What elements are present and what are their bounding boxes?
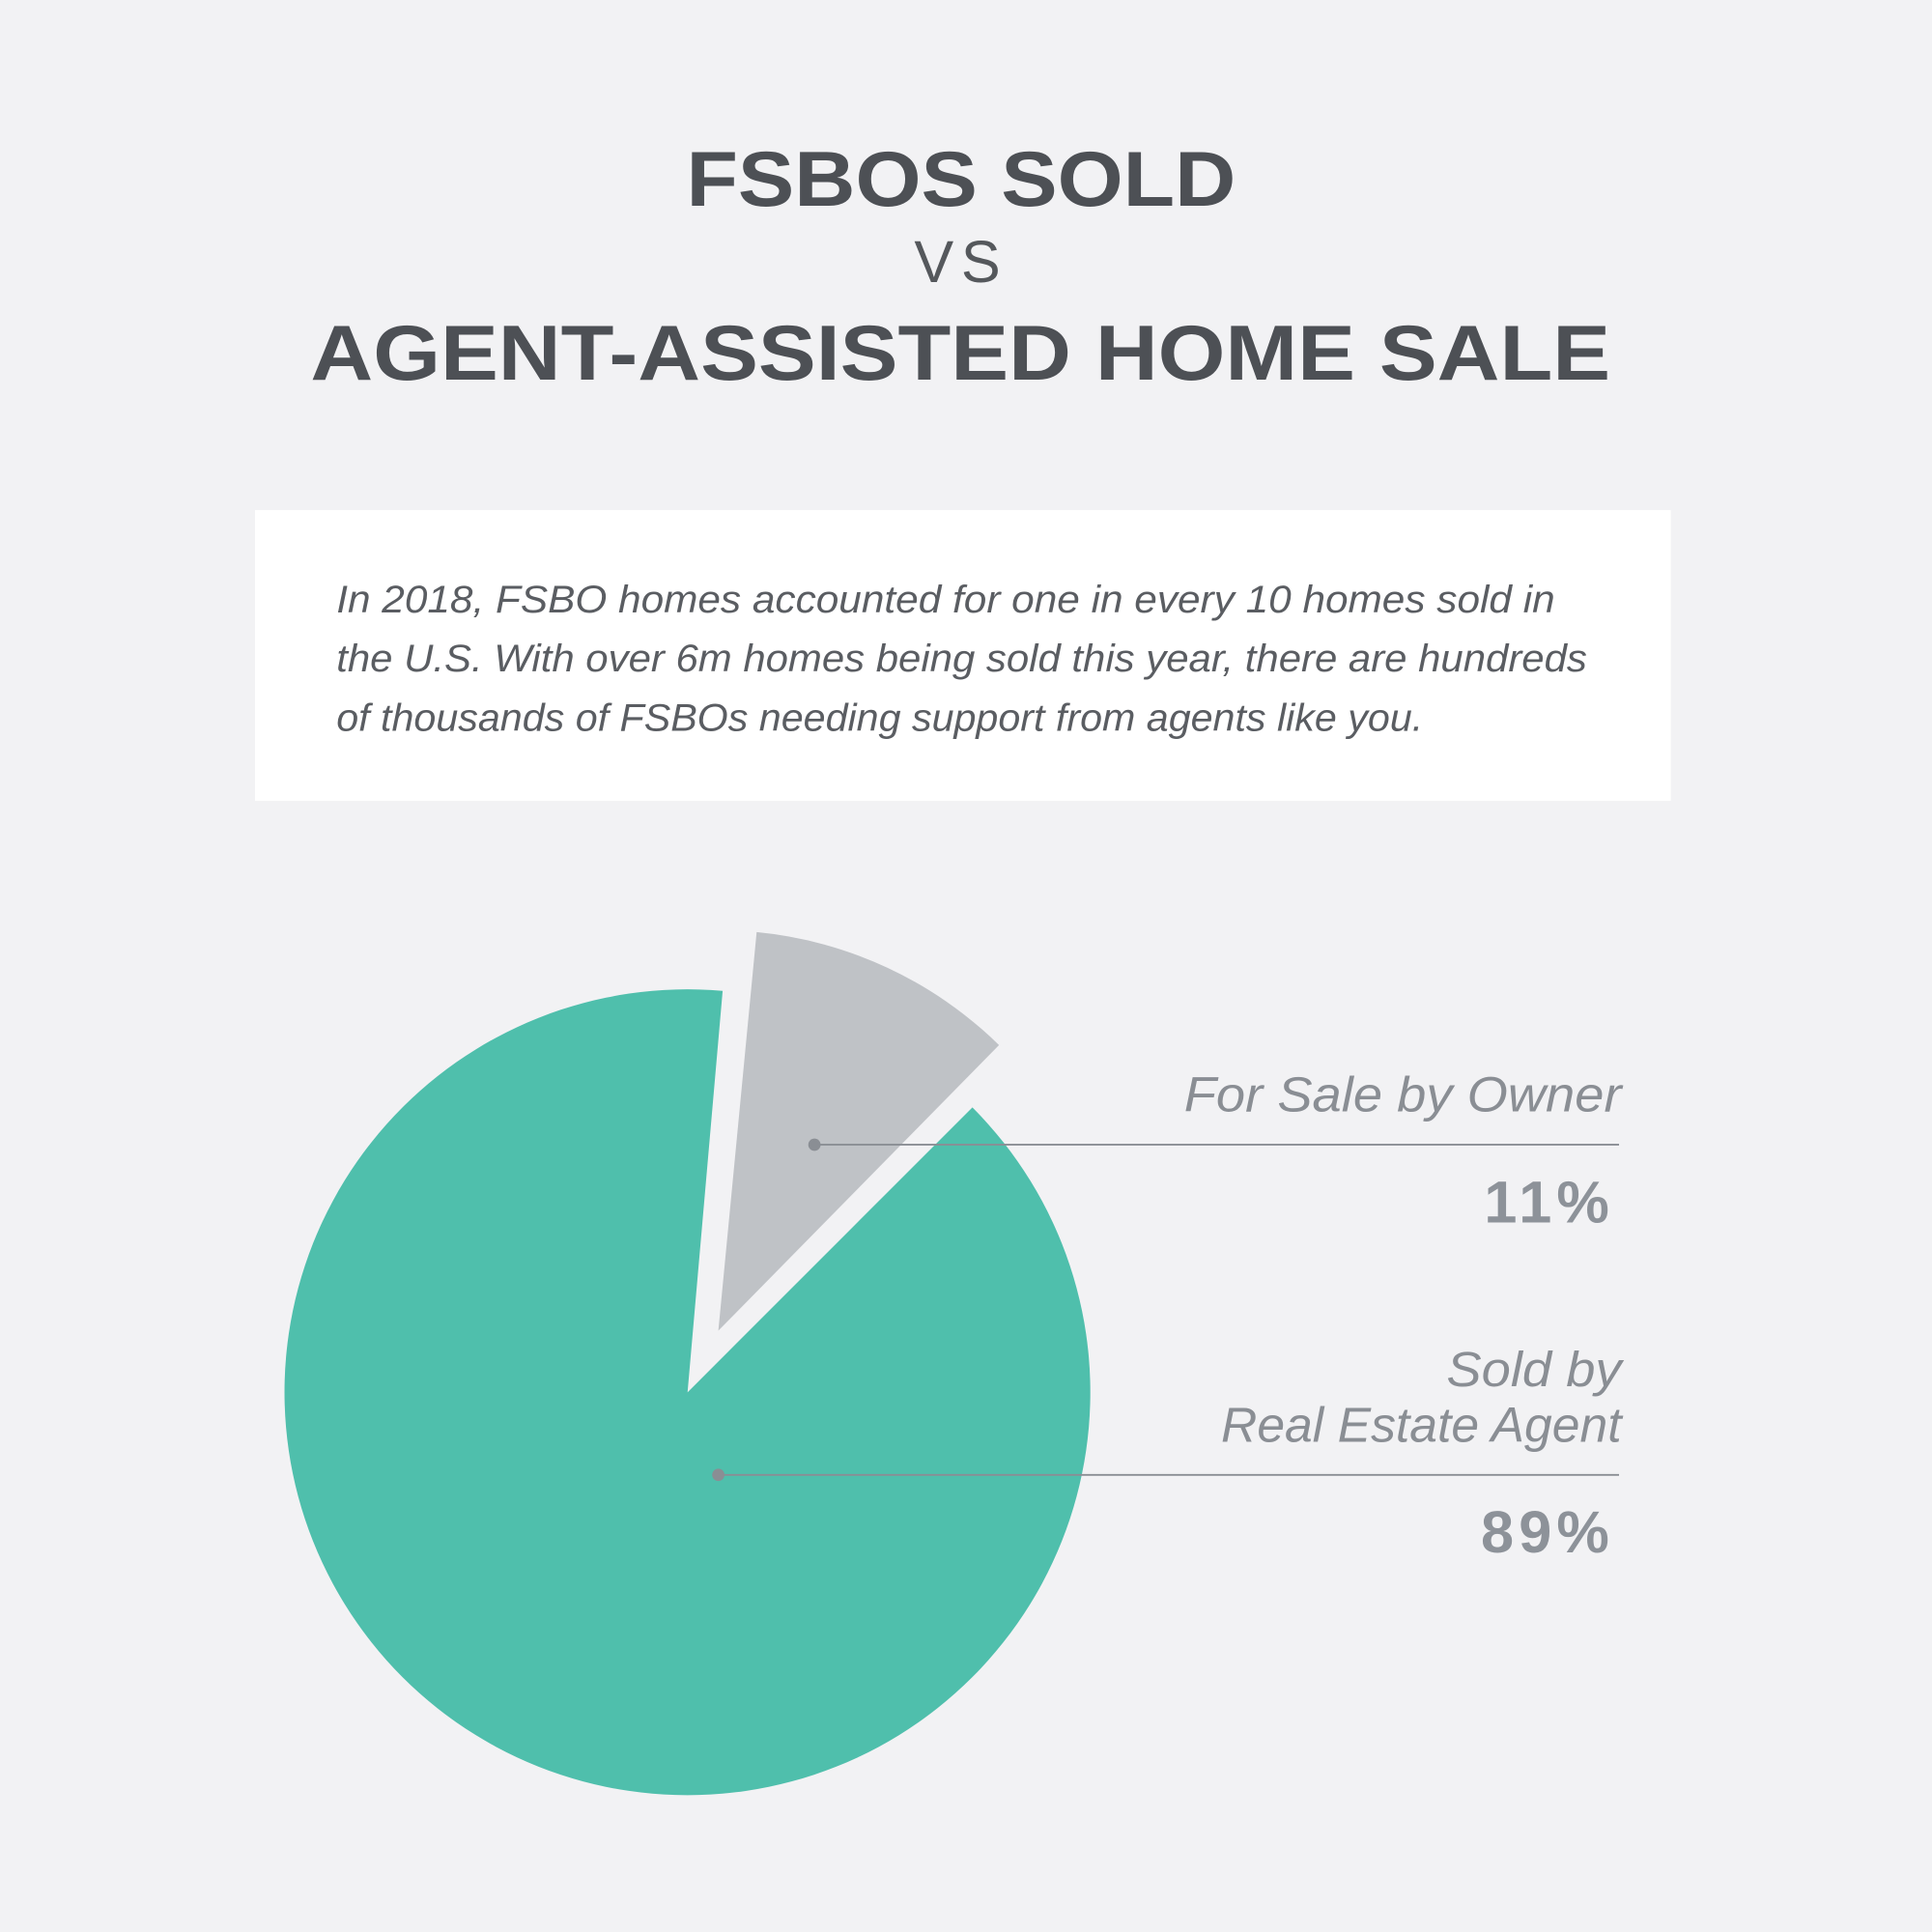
title (310, 136, 1610, 397)
intro text box: In 2018, FSBO homes accounted for one in every 10 homes sold in (336, 579, 1555, 621)
label: sold by real estate agent (712, 1342, 1625, 1565)
title: VS (914, 229, 1008, 295)
label: for sale by owner: For Sale by Owner (1184, 1067, 1624, 1122)
label: for sale by owner: 11% (1484, 1169, 1614, 1235)
label: sold by real estate agent: Sold by (1446, 1342, 1625, 1397)
intro text box: the U.S. With over 6m homes being sold this year, there are hundreds (336, 638, 1587, 680)
title: FSBOS SOLD (686, 136, 1236, 223)
label: sold by real estate agent: 89% (1481, 1499, 1614, 1565)
label: for sale by owner (809, 1067, 1624, 1235)
intro text box (255, 510, 1671, 801)
title: AGENT-ASSISTED HOME SALE (310, 310, 1610, 397)
pie chart (285, 932, 1091, 1795)
intro text box: of thousands of FSBOs needing support from agents like you. (336, 696, 1423, 739)
label: sold by real estate agent: Real Estate Agent (1221, 1397, 1623, 1452)
